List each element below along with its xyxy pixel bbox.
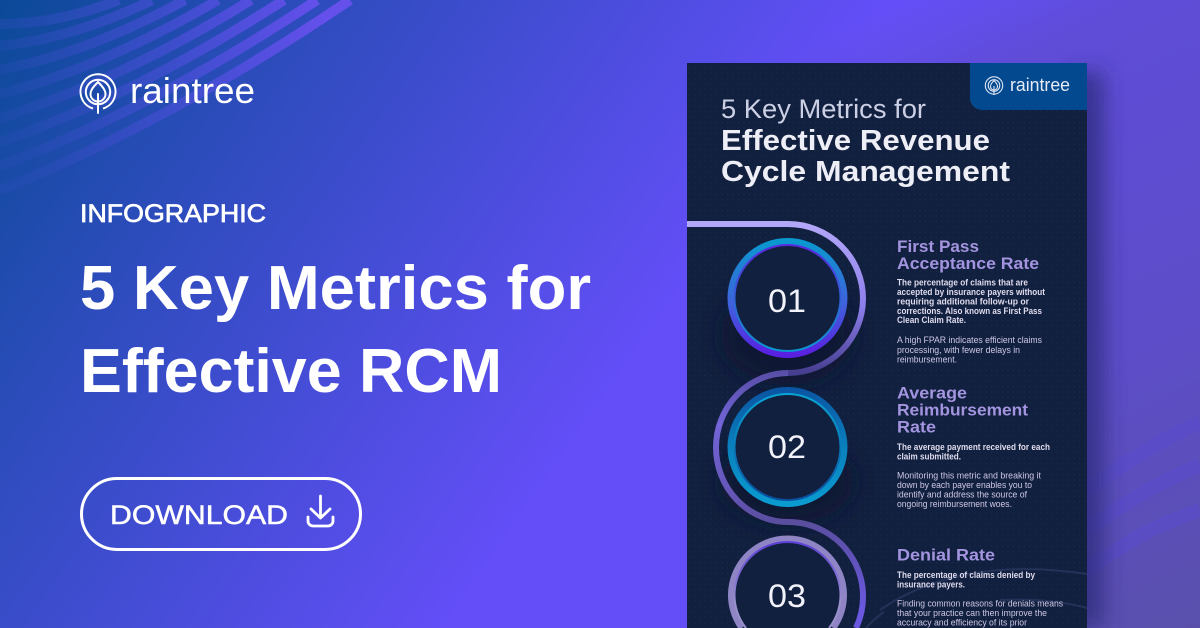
bottom right swoosh stripes xyxy=(1087,422,1200,570)
metric 02 text: identify and address the source of xyxy=(897,490,1027,500)
metric 01 text: processing, with fewer delays in xyxy=(897,345,1020,355)
icon: raintree logo xyxy=(80,74,116,113)
panel: infographic poster xyxy=(687,63,1087,628)
metric 02 text: down by each payer enables you to xyxy=(897,480,1032,490)
metric 03 circle xyxy=(731,539,844,628)
wordmark: raintree xyxy=(130,70,255,111)
poster shadow xyxy=(1070,72,1104,628)
metric 03 text: accuracy and efficiency of its prior xyxy=(897,618,1027,628)
metric 02 text: claim submitted. xyxy=(897,452,961,462)
metric 03 circle: 03 xyxy=(768,578,806,614)
metric 03 text: that your practice can then improve the xyxy=(897,608,1047,618)
metric 02 text: ongoing reimbursement woes. xyxy=(897,499,1012,509)
poster title: 5 Key Metrics for xyxy=(721,94,926,124)
main heading: 5 Key Metrics for xyxy=(80,254,591,323)
metric 02 circle xyxy=(731,390,844,504)
metric 03 text: insurance payers. xyxy=(897,580,965,590)
metric 02 text xyxy=(897,384,1050,509)
poster title: Cycle Management xyxy=(721,156,1011,188)
winding track xyxy=(687,224,863,628)
metric 02 text: Monitoring this metric and breaking it xyxy=(897,470,1041,480)
poster faint background arcs xyxy=(866,569,1087,628)
metric 01 circle: 01 xyxy=(768,283,806,319)
metric 01 text: A high FPAR indicates efficient claims xyxy=(897,335,1042,345)
poster logo tab xyxy=(970,63,1087,110)
circle shadows xyxy=(721,285,853,524)
metric 02 text: Rate xyxy=(897,418,936,436)
eyebrow label: INFOGRAPHIC xyxy=(80,200,266,228)
metric 03 text: Denial Rate xyxy=(897,546,995,564)
icon: download arrow xyxy=(308,496,333,526)
brand logo xyxy=(80,70,255,113)
metric 03 text xyxy=(897,546,1063,628)
main heading xyxy=(80,254,591,406)
metric 01 text: corrections. Also known as First Pass xyxy=(897,306,1042,316)
metric 03 text: Finding common reasons for denials means xyxy=(897,598,1063,608)
metric 02 text: Reimbursement xyxy=(897,400,1028,420)
metric 01 text: First Pass xyxy=(897,237,979,256)
metric 02 circle: 02 xyxy=(768,429,806,465)
metric 01 text: accepted by insurance payers without xyxy=(897,287,1045,297)
download button: DOWNLOAD xyxy=(110,500,288,530)
metric 01 text: Clean Claim Rate. xyxy=(897,315,966,325)
metric 01 text: requiring additional follow-up or xyxy=(897,296,1029,306)
decorative swoosh stripes xyxy=(0,0,350,190)
poster title xyxy=(721,94,1011,188)
icon: small raintree logo xyxy=(985,77,1003,95)
download button xyxy=(82,478,360,550)
metric 02 text: Average xyxy=(897,384,967,402)
metric 03 text: The percentage of claims denied by xyxy=(897,570,1035,580)
main heading: Effective RCM xyxy=(80,337,502,406)
metric 01 circle xyxy=(731,242,844,354)
metric 02 text: The average payment received for each xyxy=(897,442,1050,452)
metric 01 text: The percentage of claims that are xyxy=(897,278,1028,288)
metric 01 text: Acceptance Rate xyxy=(897,254,1039,273)
small wordmark: raintree xyxy=(1010,75,1070,95)
metric 01 text xyxy=(897,237,1045,364)
metric 01 text: reimbursement. xyxy=(897,354,957,364)
poster title: Effective Revenue xyxy=(721,125,990,157)
